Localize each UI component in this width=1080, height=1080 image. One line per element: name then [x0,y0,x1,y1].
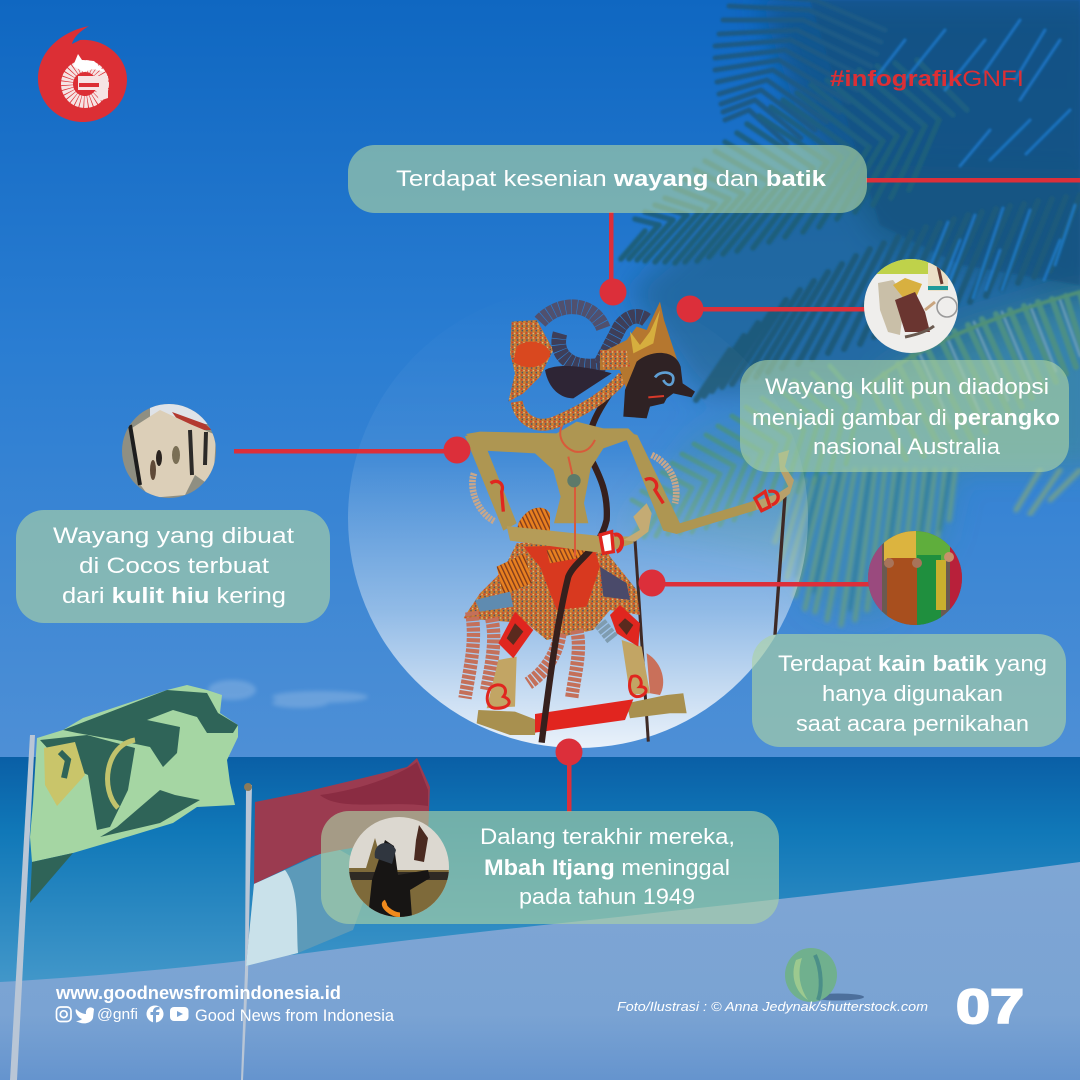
connector: puppet to batik [638,570,872,596]
logo [38,26,127,122]
callout text: saat acara pernikahan [796,711,1029,736]
connector: puppet to dalang [556,738,582,812]
callout: shark skin [16,510,330,623]
face [623,353,695,418]
flag cloth [30,685,238,862]
flag pole [241,785,252,1080]
handle: @gnfi [97,1006,138,1023]
logo emblem [67,54,108,102]
frond: main upper leaflets [635,60,967,225]
footer social [56,1006,395,1025]
right stick [775,497,785,635]
photo credit: Foto/Ilustrasi : © Anna Jedynak/shutterstock.com [617,999,928,1014]
callout text: menjadi gambar di perangko [752,405,1060,430]
red knee diamonds [498,612,533,658]
callout: stamp [740,360,1069,472]
ankle rings [487,685,509,708]
callout text: Mbah Itjang meninggal [484,855,730,880]
channel name: Good News from Indonesia [195,1007,395,1025]
callout text: di Cocos terbuat [79,553,270,578]
background: sky [0,0,1080,770]
legs [487,657,517,708]
callout text: nasional Australia [813,434,1001,459]
background: sea [0,757,1080,1007]
page number: 07 [956,981,1024,1034]
hair loop [540,307,603,328]
flag pole [10,735,35,1080]
connector: top pill to puppet [600,212,626,306]
footer website: www.goodnewsfromindonesia.id [55,983,341,1003]
connector: puppet to stamp [676,296,866,322]
icon: youtube [170,1007,188,1021]
frond: centre right, green [632,366,860,538]
callout text: Dalang terakhir mereka, [480,824,735,849]
callout: batik [752,634,1066,747]
flag dark top patch [63,690,238,767]
hashtag: #infografik GNFI [830,66,1024,91]
icon: twitter [76,1007,94,1023]
white band [246,850,375,966]
sleeve ornaments [472,455,676,522]
left hand [623,503,652,542]
flag: Cocos Islands [10,685,238,1080]
callout: dalang [321,811,779,924]
wayang puppet [463,302,794,743]
photo: stamp [864,259,958,353]
red base bar [535,699,633,733]
dark crown mass [810,0,1080,285]
callout text: dari kulit hiu kering [62,583,286,608]
central circle glow [348,288,808,748]
callout text: Wayang kulit pun diadopsi [765,374,1049,399]
coconut [785,948,864,1002]
left arm [465,433,517,531]
necklace [560,420,595,557]
icon: instagram [56,1007,71,1022]
crown [600,302,678,400]
shoulder swoop [517,377,623,425]
connector: top pill to right edge [866,178,1080,182]
torso [466,422,637,523]
right arm [623,432,757,534]
callout text [53,523,295,608]
background: sand [0,862,1080,1080]
skirt [463,508,640,640]
flag dark lower patch [100,790,200,837]
flag dark mid patch [40,735,135,830]
connector: shark skin to puppet [234,436,470,464]
callout text [480,824,735,909]
photo: shark skin wayang [122,404,220,498]
icon: facebook [146,1006,164,1023]
thick stick [542,373,625,743]
photo: dalang [349,817,450,917]
photo: batik clothes [868,531,962,628]
flag: Indonesia [241,758,430,1080]
callout text: pada tahun 1949 [519,884,695,909]
tassels [465,612,613,698]
flag emblem [44,742,85,806]
callout text [778,651,1047,736]
foot base [477,710,537,735]
callout text: Terdapat kain batik yang [778,651,1047,676]
palm foliage shading [620,0,1080,620]
frond: right dark [696,195,1080,400]
frond: hanging leaves [775,470,955,625]
frond: main lower leaflets [621,120,939,263]
bracelets [491,479,778,553]
back ornament [508,320,553,402]
bright sky slits [871,20,1075,322]
background: clouds [208,680,368,708]
frond: top [715,0,885,144]
red band [254,758,430,884]
callout text: Terdapat kesenian wayang dan batik [396,166,827,191]
frond: right arch, green [870,293,1080,459]
callout text: hanya digunakan [822,681,1003,706]
callout text: Wayang yang dibuat [53,523,295,548]
right hand [755,450,794,510]
middle stick [635,540,648,742]
palm fronds [621,0,1080,625]
callout text [752,374,1060,459]
callout: top [348,145,867,213]
